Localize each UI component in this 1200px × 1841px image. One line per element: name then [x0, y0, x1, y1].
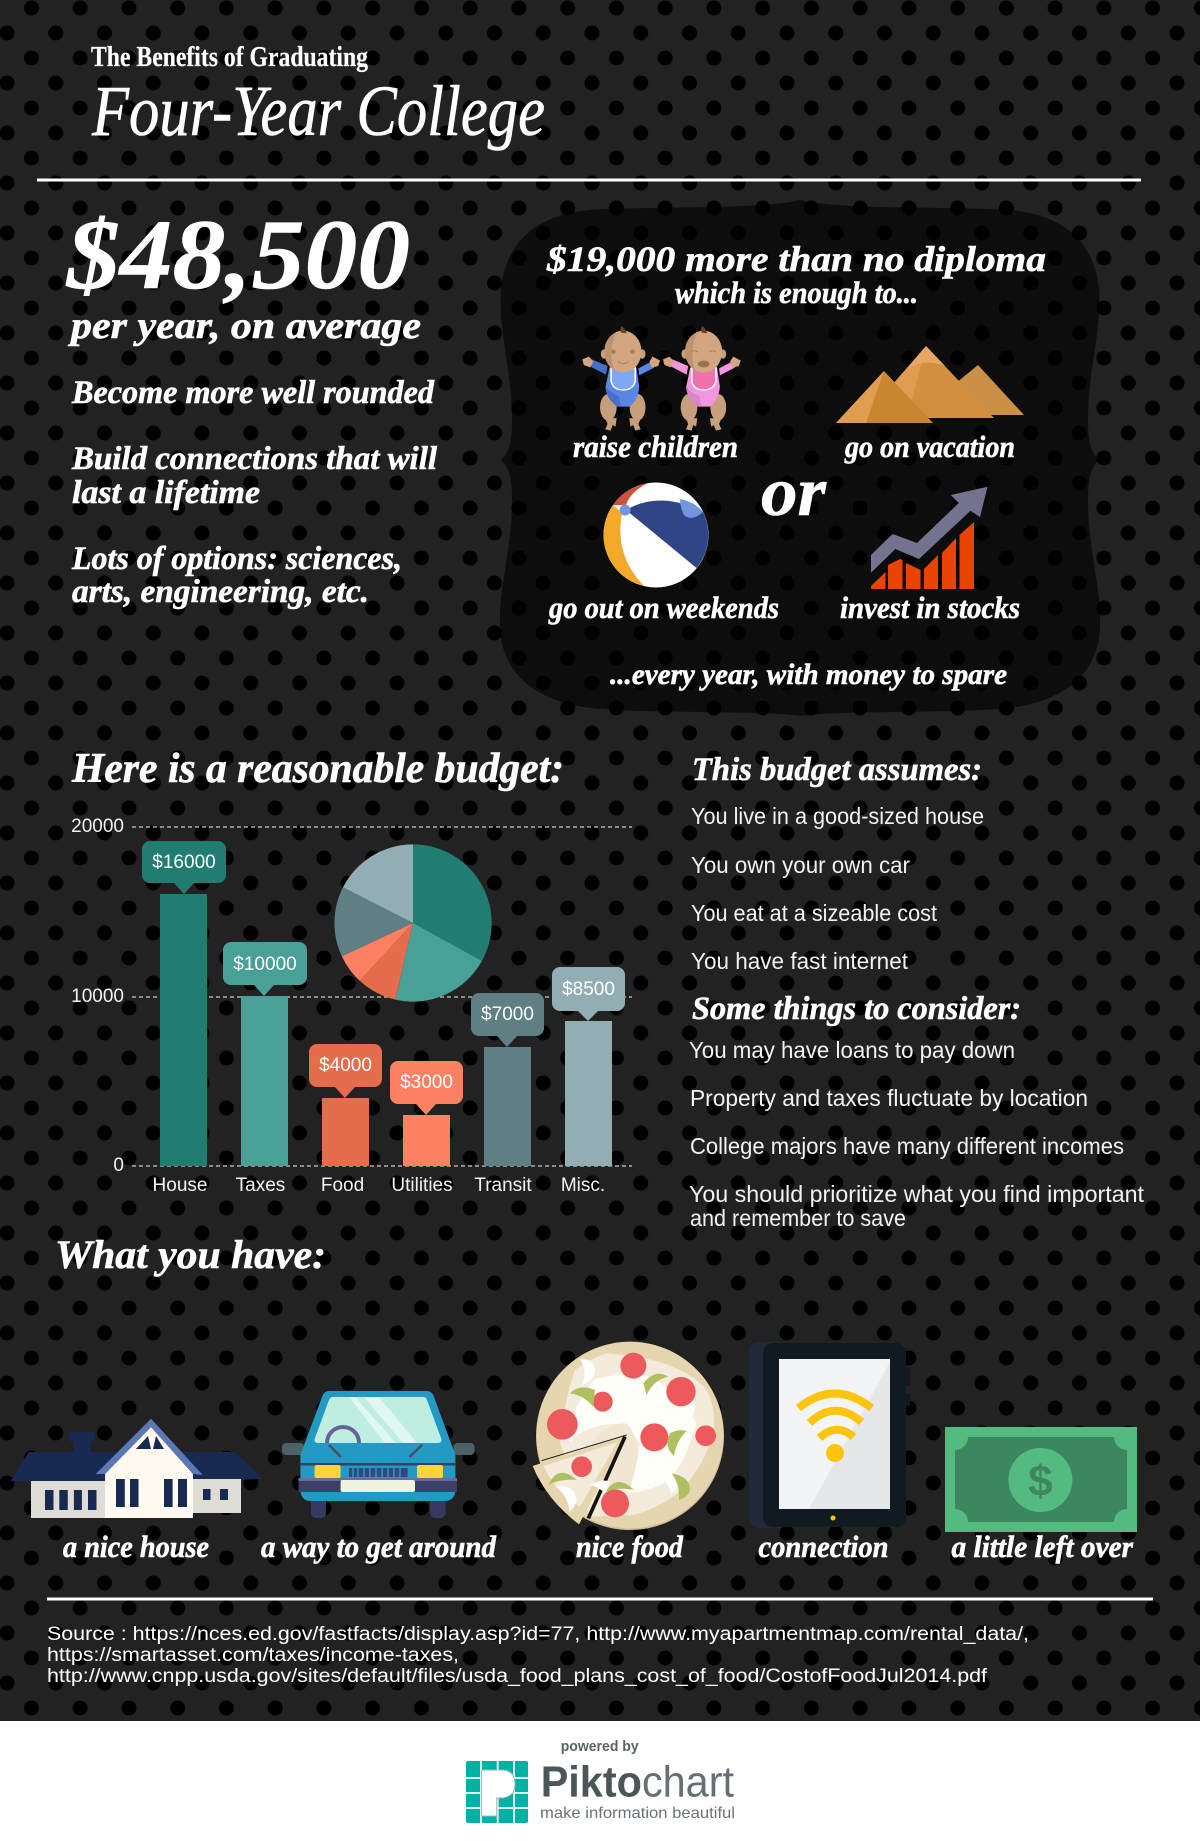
- considerations list: College majors have many different incomes: [690, 1133, 1124, 1159]
- x axis labels: Transit: [474, 1175, 532, 1196]
- bar: House: [142, 841, 226, 1166]
- panel footer: ...every year, with money to spare: [610, 658, 1007, 691]
- pie chart: [334, 844, 492, 1002]
- icon: house: [11, 1419, 263, 1518]
- assumptions list: You eat at a sizeable cost: [691, 900, 938, 926]
- bar: Taxes: $10000: [233, 954, 297, 975]
- label: a little left over: a little left over: [952, 1529, 1134, 1564]
- x axis labels: [153, 1175, 605, 1196]
- heading: considerations: Some things to consider:: [692, 991, 1021, 1027]
- tagline: make information beautiful: [540, 1805, 735, 1822]
- panel subheading: which is enough to...: [675, 275, 918, 310]
- y axis labels: 10000: [71, 986, 124, 1007]
- icon: car: [282, 1391, 474, 1518]
- label: go on vacation: go on vacation: [844, 429, 1015, 464]
- bar: Utilities: [390, 1061, 463, 1166]
- bars: [871, 522, 974, 589]
- x axis labels: House: [153, 1175, 207, 1196]
- label: nice food: nice food: [576, 1529, 683, 1564]
- onions: [556, 1359, 695, 1512]
- word: or: or: [761, 454, 827, 531]
- assumptions list: You own your own car: [691, 852, 910, 878]
- bar: Utilities: $3000: [400, 1072, 453, 1093]
- baby in blue: [582, 326, 660, 431]
- y axis labels: 0: [113, 1155, 124, 1176]
- benefit 2: last a lifetime: [72, 475, 260, 511]
- x axis labels: Taxes: [236, 1175, 285, 1196]
- label: a nice house: a nice house: [63, 1529, 209, 1564]
- x axis labels: Misc.: [561, 1175, 605, 1196]
- icon: stock chart: [871, 487, 988, 589]
- x axis labels: Utilities: [391, 1175, 453, 1196]
- source text: http://www.cnpp.usda.gov/sites/default/files/usda_food_plans_cost_of_food/CostofFoodJul2014.pdf: [47, 1666, 988, 1687]
- benefit 1: Become more well rounded: [71, 375, 434, 411]
- benefit 2: Build connections that will: [71, 441, 438, 477]
- label: invest in stocks: invest in stocks: [840, 590, 1020, 625]
- bar chart: [71, 816, 632, 1196]
- bar: Misc: [552, 967, 625, 1166]
- benefit 3: [71, 541, 402, 610]
- panel: what the extra money buys: [500, 200, 1100, 716]
- wordmark: Piktochart: [541, 1758, 734, 1807]
- text block: budget assumptions: [689, 752, 1145, 1231]
- label: connection: connection: [758, 1529, 888, 1564]
- icon: money bill: [945, 1427, 1137, 1532]
- considerations list: You may have loans to pay down: [689, 1037, 1015, 1063]
- x axis labels: Food: [321, 1175, 364, 1196]
- bar: Transit: [471, 993, 544, 1166]
- source text: [47, 1624, 1029, 1687]
- source text: Source : https://nces.ed.gov/fastfacts/display.asp?id=77, http://www.myapartmentmap.com/rental_data/,: [47, 1624, 1029, 1645]
- bar: Misc: $8500: [562, 979, 615, 1000]
- peppers: [548, 1374, 690, 1500]
- left column: salary and benefits: [65, 199, 438, 610]
- icon: pizza: [533, 1342, 724, 1530]
- icon: pyramids: [836, 346, 1024, 423]
- y axis labels: 20000: [71, 816, 124, 837]
- logo mark: [466, 1761, 528, 1823]
- bar: Transit: $7000: [481, 1004, 534, 1025]
- icon: babies: [582, 326, 741, 431]
- icon: tablet with wifi: [749, 1342, 910, 1528]
- bar: Taxes: [223, 942, 307, 1166]
- salary figure: $48,500: [65, 199, 410, 310]
- tomatoes: [547, 1353, 716, 1517]
- assumptions list: You have fast internet: [691, 948, 909, 974]
- considerations list: Property and taxes fluctuate by location: [690, 1085, 1088, 1111]
- subtitle: The Benefits of Graduating: [91, 42, 368, 73]
- benefit 3: Lots of options: sciences,: [71, 541, 402, 577]
- considerations list: You should prioritize what you find important: [689, 1181, 1145, 1207]
- label: a way to get around: a way to get around: [261, 1529, 496, 1564]
- bar: Food: $4000: [319, 1055, 372, 1076]
- benefit 2: [71, 441, 438, 511]
- y axis labels: [71, 816, 124, 1176]
- benefit 3: arts, engineering, etc.: [72, 574, 369, 610]
- footer: powered by Piktochart: [0, 1721, 1200, 1841]
- source text: https://smartasset.com/taxes/income-taxes,: [47, 1645, 459, 1666]
- heading: budget: Here is a reasonable budget:: [71, 746, 564, 792]
- considerations list: [689, 1037, 1145, 1231]
- bar: Food: [309, 1044, 382, 1166]
- heading: what you have: What you have:: [55, 1232, 326, 1277]
- assumptions list: You live in a good-sized house: [691, 803, 984, 829]
- pizza slice: [533, 1435, 627, 1524]
- title: [91, 42, 545, 151]
- assumptions list: [691, 803, 984, 974]
- label: go out on weekends: go out on weekends: [548, 590, 779, 625]
- icon: money bill: $: [1028, 1457, 1053, 1506]
- heading: assumptions: This budget assumes:: [692, 752, 982, 788]
- panel heading: $19,000 more than no diploma: [546, 239, 1046, 279]
- powered by: powered by: [561, 1738, 639, 1755]
- bar: House: $16000: [152, 852, 216, 873]
- label: raise children: raise children: [573, 429, 738, 464]
- icon: beach ball: [604, 482, 708, 588]
- salary caption: per year, on average: [68, 305, 421, 347]
- baby in pink: [663, 326, 741, 431]
- considerations list: and remember to save: [690, 1205, 906, 1231]
- arrow: [871, 487, 988, 573]
- main title: Four-Year College: [91, 71, 545, 151]
